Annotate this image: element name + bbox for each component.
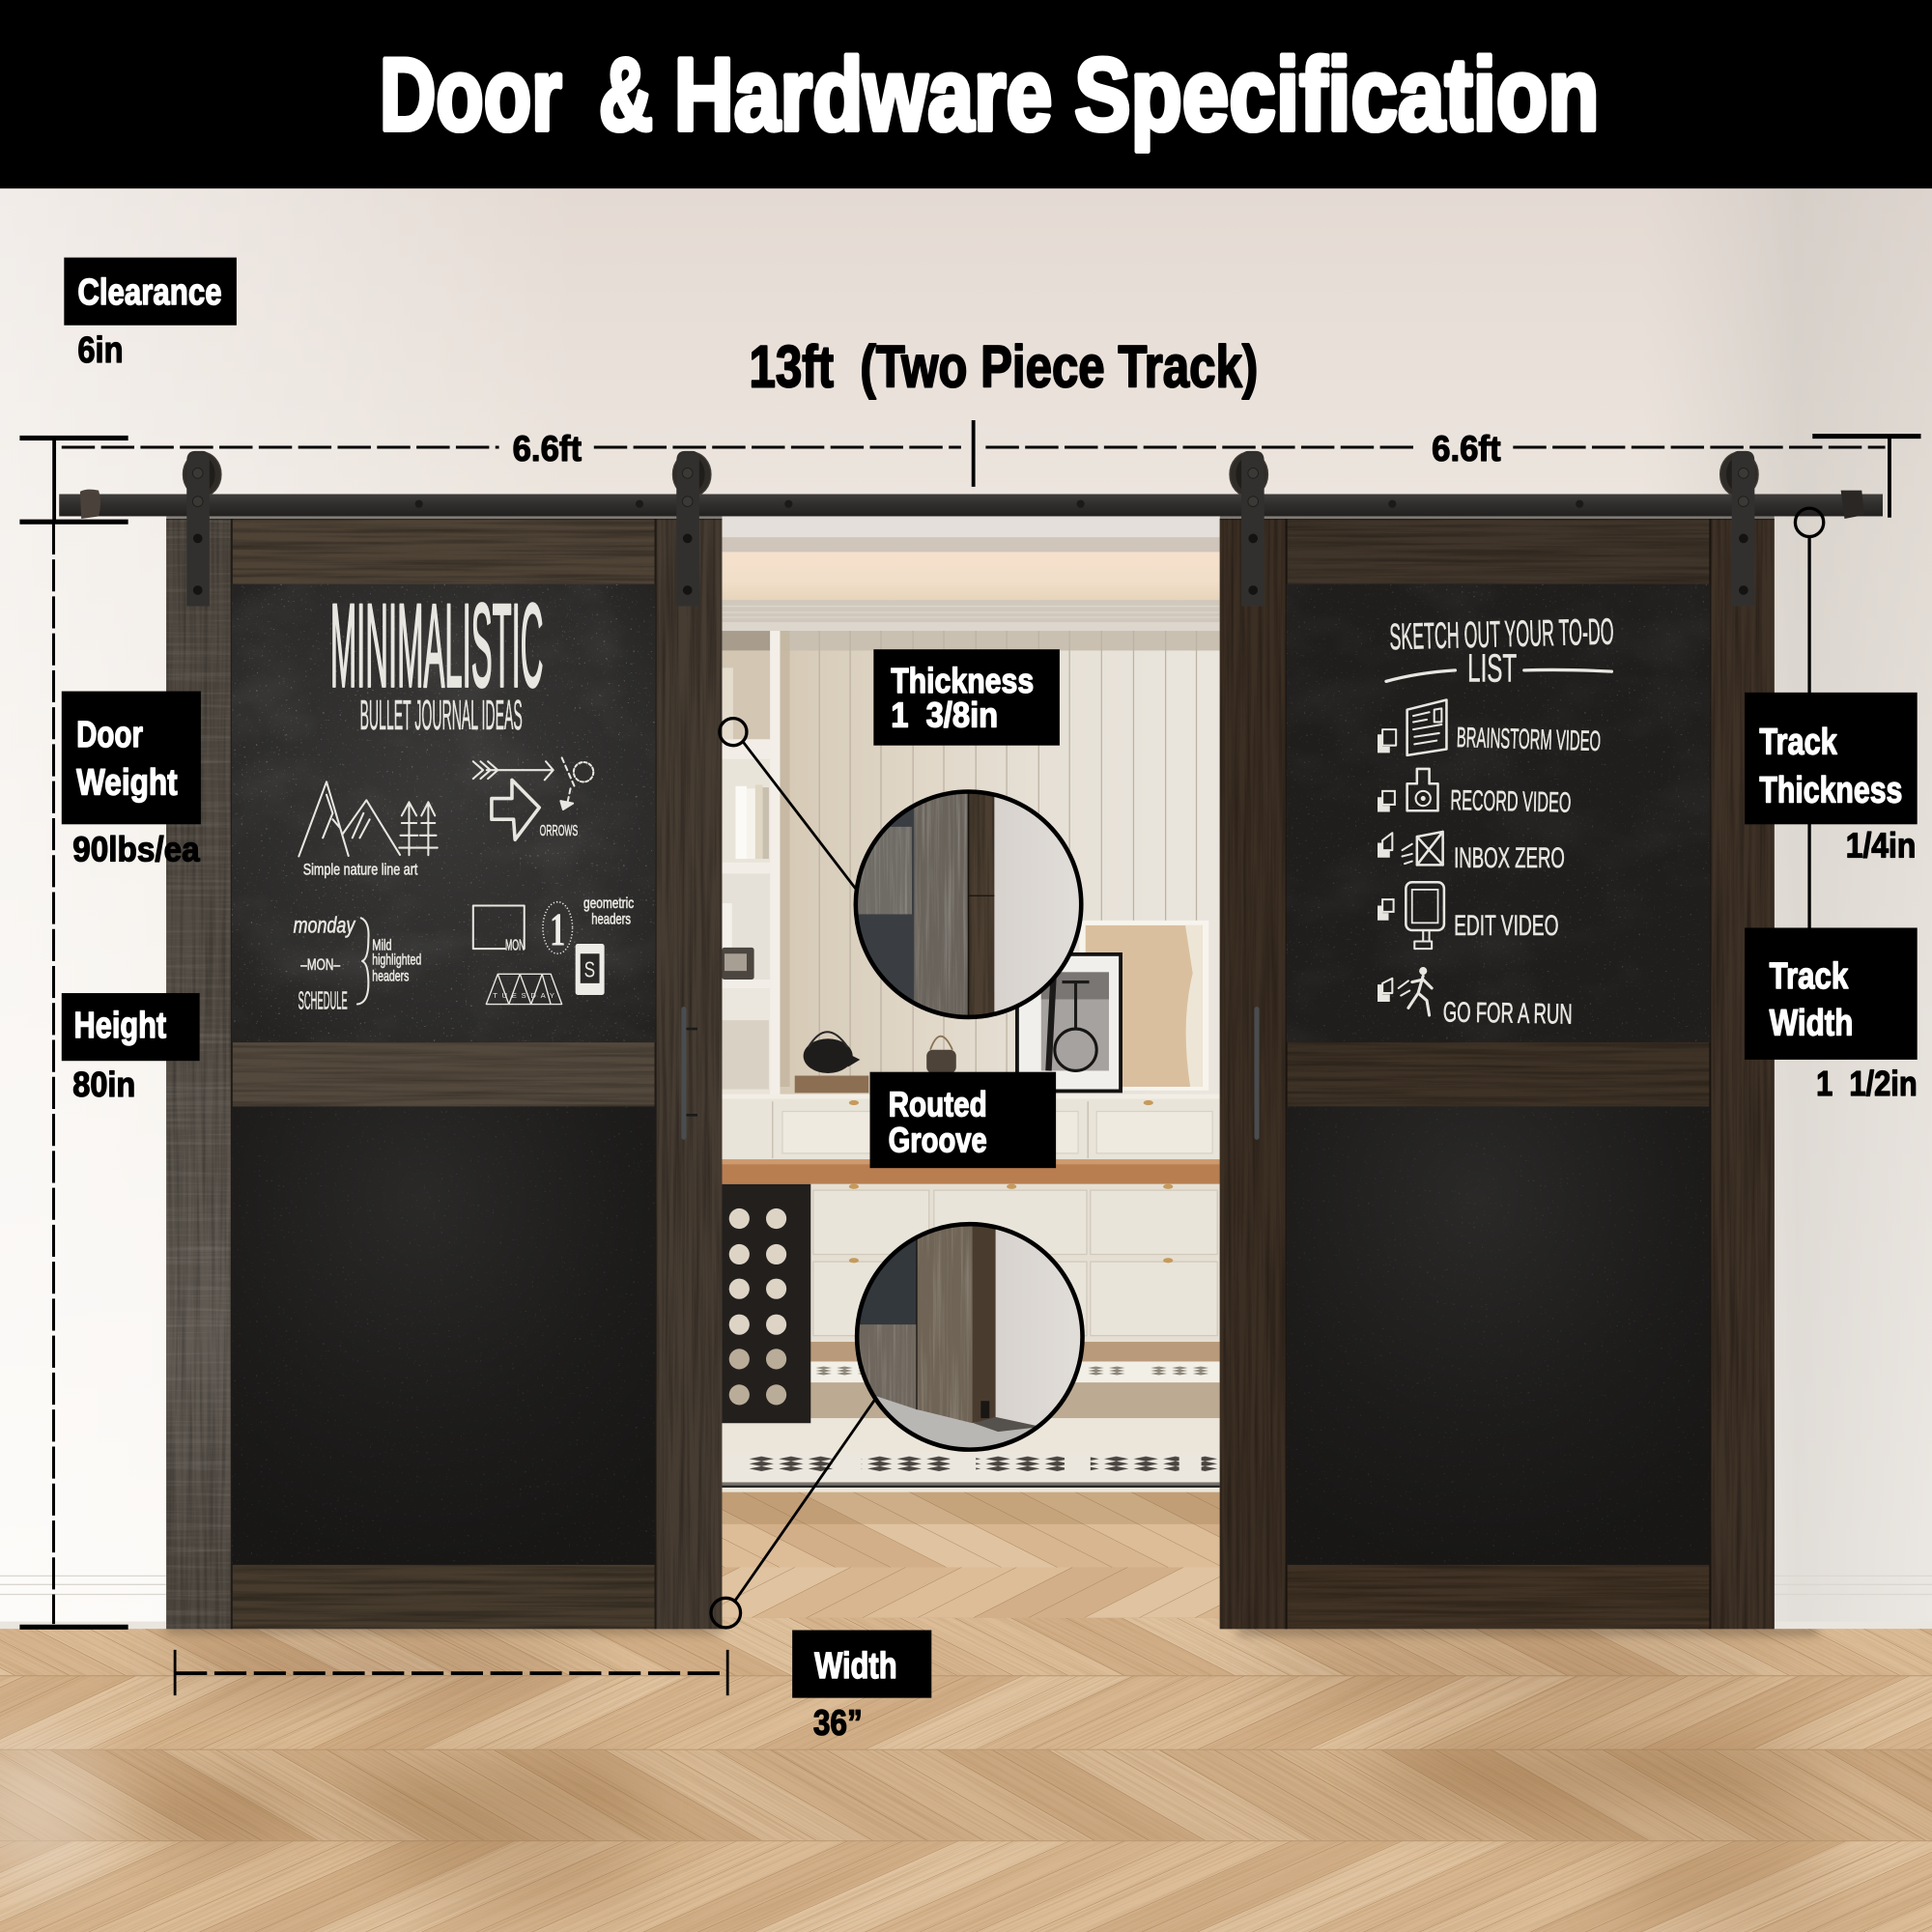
to-do item: inbox zero [1378,832,1565,874]
label: clearance: Clearance [77,271,222,313]
chalk caption: mild highlighted headers: headers [372,968,410,984]
label: door weight [62,692,201,824]
label: door weight: Weight [76,762,178,804]
door height dimension line [19,523,128,1627]
chalk open rectangle header [473,906,525,949]
label: thickness: Thickness [891,662,1034,700]
track end stop left [80,490,100,519]
right section length: 6.6ft [1432,429,1501,469]
value: track thickness: 1/4in [1846,827,1916,866]
label: track width: Width [1770,1002,1853,1043]
value: height: 80in [72,1065,135,1104]
chalk art: minimalistic bullet journal: SCHEDULE [298,988,348,1015]
chalk caption: geometric headers [583,895,635,928]
chalk caption: mild highlighted headers: highlighted [372,952,421,969]
hanger strap 2 [672,451,711,607]
total track dimension title: 13ft (Two Piece Track) [750,334,1258,400]
chalk numeral badge: 1 [550,904,565,955]
to-do item: record video [1378,769,1572,819]
chalk arrows [473,757,593,839]
title: Hardware [674,37,1052,153]
label: track width [1745,927,1918,1060]
title: & [599,37,653,153]
label: width: Width [814,1645,897,1687]
chalk caption: nature: Simple nature line art [303,861,418,879]
to-do item: go for a run [1378,967,1573,1031]
right door handle [1254,1007,1260,1140]
label: track thickness: Track [1759,722,1837,763]
thickness callout marker and leader [720,719,856,890]
chalk tuesday bunting [486,974,562,1005]
kitchen cabinets [722,1094,1220,1345]
value: width: 36” [813,1703,863,1743]
chalk caption: arrows: ORROWS [540,823,578,839]
right door upper chalkboard panel [1287,584,1710,1042]
room seen through the door opening [722,516,1220,1492]
chalk s badge: S [584,956,595,981]
to-do item: edit video [1378,882,1559,949]
hanger strap 3 [1230,451,1267,607]
chalk art: to-do list [1378,611,1614,1031]
teapots and tray [795,1032,956,1093]
floor and rug [722,1342,1220,1488]
left section length: 6.6ft [513,429,582,469]
label: door weight: Door [76,714,143,755]
magnifier: routed groove detail [850,1220,1091,1454]
label: routed groove: Routed [889,1086,987,1124]
chalk tuesday bunting: TUESDAY [493,991,554,1000]
title [380,37,1600,153]
text: SKETCH OUT YOUR TO-DO [1389,611,1614,658]
left door upper chalkboard panel [232,584,656,1042]
chalk list subheading [1386,645,1611,690]
label: width [792,1631,931,1698]
chalk art: minimalistic bullet journal [294,579,635,1015]
label: height: Height [74,1005,166,1046]
to-do item: brainstorm: BRAINSTORM VIDEO [1456,722,1602,757]
hanger strap 4 [1720,451,1758,607]
label: track width: Track [1770,955,1849,997]
clearance bracket right [1812,437,1921,518]
hanger strap 1 [183,451,221,607]
track callout marker and leader [1795,508,1824,936]
wall background [0,188,1932,1630]
door width dimension line [175,1650,727,1695]
routed groove callout marker and leader [711,1400,875,1628]
chalk caption: geometric headers: headers [591,912,631,928]
left door lower chalkboard panel [232,1106,656,1565]
to-do item: go for a run: GO FOR A RUN [1443,996,1573,1031]
perforated black table leg [722,1184,810,1423]
label: height [62,993,200,1061]
chalk art: minimalistic bullet journal: BULLET JOURNAL IDEAS [359,693,523,739]
left barn door [166,519,722,1629]
magnifier: door edge thickness detail [850,788,1091,1023]
chalk caption: geometric headers: geometric [583,895,635,912]
label: thickness: 1 3/8in [891,696,998,735]
chalk caption: mon: –MON– [300,955,341,974]
chalk brace [357,918,369,1005]
value: clearance: 6in [77,329,124,371]
to-do item: record video: RECORD VIDEO [1450,784,1572,819]
chalk caption: mild highlighted headers [372,937,421,984]
track end stop right [1841,491,1864,519]
to-do item: inbox zero: INBOX ZERO [1454,842,1565,874]
floor: chevron wood [0,1488,1932,1932]
value: track width: 1 1/2in [1816,1065,1918,1103]
track length dimension lines [62,420,1886,487]
chalk list subheading: LIST [1467,645,1517,690]
title: Specification [1074,37,1600,153]
chalk s badge [576,944,605,995]
value: door weight: 90lbs/ea [72,831,201,869]
clearance bracket left [19,438,128,523]
label: track thickness [1745,693,1918,824]
right door frame rails and stiles [1220,519,1775,1629]
barn door track rail [59,494,1883,520]
left bookshelf [722,631,780,1096]
chalk mountains and trees [298,781,438,856]
left door frame rails and stiles [166,519,722,1629]
label: routed groove [870,1072,1056,1168]
chalk caption: mild highlighted headers: Mild [372,937,392,953]
label: thickness [873,649,1060,746]
to-do item: brainstorm [1378,699,1602,757]
left door handle [681,1007,697,1140]
chalk caption: monday: monday [294,913,356,938]
text: MINIMALISTIC [330,579,543,711]
panelled back wall [780,631,1220,1096]
to-do item: edit video: EDIT VIDEO [1454,910,1559,942]
title banner [0,0,1932,188]
label: clearance [64,258,237,326]
framed pictures [1015,921,1208,1093]
right barn door [1220,519,1775,1629]
title: Door [380,37,562,153]
label: routed groove: Groove [889,1122,987,1160]
chalk caption: mon header: MON [505,937,525,953]
right door lower chalkboard panel [1287,1106,1710,1565]
